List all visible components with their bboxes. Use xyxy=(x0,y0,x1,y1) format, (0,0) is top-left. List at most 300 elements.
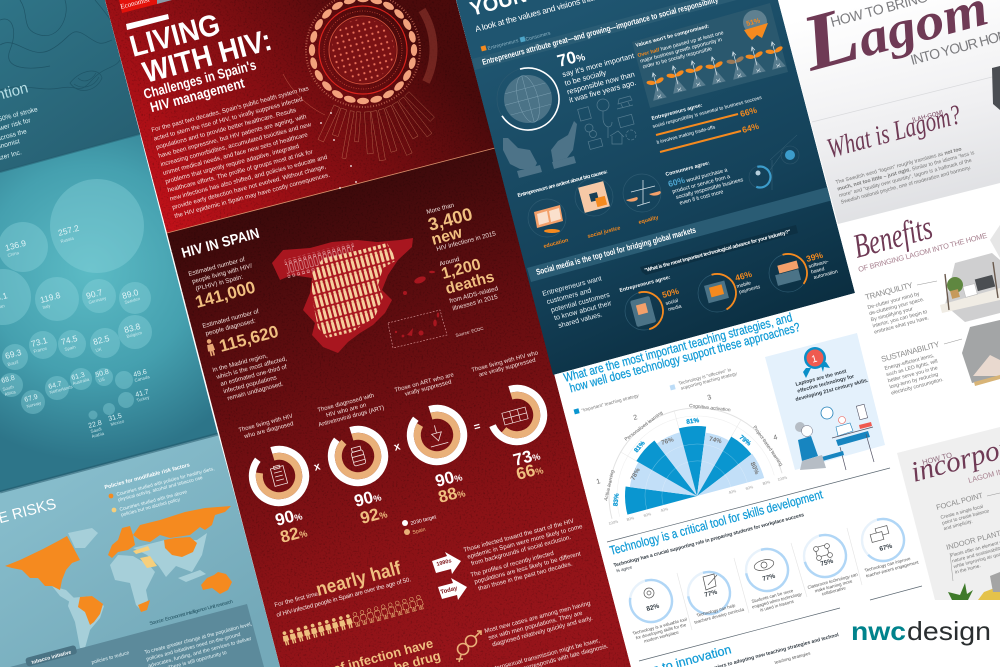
text: nearly half: of HIV-infected people in Spain are over the age of 50. xyxy=(276,576,412,619)
stat: mobile payments 46: payments xyxy=(738,284,761,295)
icon: equality xyxy=(623,174,661,226)
text block: Madrid region: remain undiagnosed. xyxy=(227,380,284,402)
item: sustainability: long-term by reducing xyxy=(889,372,939,390)
text block: intro: new infections has also shifted, and policies to educate and xyxy=(169,154,329,203)
illustration: virus xyxy=(283,0,434,189)
chart: bubble chart: 61.3 xyxy=(71,372,86,382)
heading: teaching strategies: What are the most important teaching strategies, and xyxy=(562,310,794,385)
chart: ring 1 diagnosed: 90% xyxy=(273,505,304,530)
icon: globe ring xyxy=(490,61,566,137)
chart labels: categories xyxy=(596,394,784,501)
callout: initiatives box: policies to reduce xyxy=(91,650,130,666)
illustration: brain outline xyxy=(0,0,123,90)
panel: how to incorporate lagom xyxy=(897,422,1000,600)
chart labels: percentages: 81% xyxy=(633,440,647,454)
item: indoor plant xyxy=(945,527,1000,581)
icon: social justice: social justice xyxy=(587,225,621,240)
stat: 70 percent: it was five years ago. xyxy=(568,78,637,105)
panel: Lagom benefits xyxy=(849,209,1000,397)
chart: bubble chart: 50.8 xyxy=(95,369,110,379)
item: sustainability: Energy-efficient items, xyxy=(884,353,935,372)
chart labels: ticks xyxy=(608,475,788,526)
chart: ring 4 combined: Those living with HIV who xyxy=(471,350,540,374)
legend: rings: Spain xyxy=(412,527,426,536)
stat: automation 39 xyxy=(765,250,839,296)
stat: people living with HIV xyxy=(188,256,255,308)
stat: automation 39: 39% xyxy=(805,250,824,264)
logo: nwc design: nwc xyxy=(851,616,906,646)
chart: ring 3 suppressed: 90% xyxy=(433,466,464,491)
text block: shared values: shared values. xyxy=(558,311,603,330)
stat: collaborative 75: 75% xyxy=(820,558,834,568)
chart: bubble chart: UK xyxy=(95,347,102,353)
stat: automation 39: automation xyxy=(813,269,839,281)
icon: plants xyxy=(644,39,788,101)
chart: bubble chart: 22.8 xyxy=(88,420,103,430)
callout: laptops xyxy=(765,333,885,470)
text block: intro: problems that urgently require adaptive, integrated xyxy=(165,143,300,186)
chart: fan chart xyxy=(589,388,782,519)
item: focal point: Create a single focal xyxy=(940,504,984,521)
stat: valuable tool 82: 82% xyxy=(646,603,660,613)
callout: laptops: developing 21st century skills. xyxy=(795,378,870,403)
stats: consumers agree xyxy=(665,160,746,208)
footer: logo area xyxy=(841,601,1000,667)
chart: bubble chart: 68.8 xyxy=(1,375,16,385)
chart: bubble chart: Arabia xyxy=(91,431,105,439)
chart: bubble chart: Turkey xyxy=(136,394,151,403)
panel: Lagom header xyxy=(778,0,1000,224)
stats: entrepreneurs agree: Entrepreneurs agree: xyxy=(651,102,703,122)
map legend: Policies for modifiable risk factors xyxy=(104,462,191,491)
item: sustainability: better serve you in the xyxy=(887,365,939,384)
legend: entrepreneurs consumers: Entrepreneurs xyxy=(487,38,520,52)
callout: initiatives box: tobacco initiative xyxy=(31,650,72,666)
chart labels: categories: Cognitive activation xyxy=(689,403,731,413)
chart labels: categories: 1 xyxy=(596,478,601,486)
chart: bubble chart xyxy=(0,179,152,439)
text block: intro: healthcare efforts. The profile of groups most at risk for xyxy=(167,149,314,194)
chart: bubble chart: 82.5 xyxy=(92,333,111,347)
title: Living with HIV: WITH HIV: xyxy=(139,24,275,90)
text block: new cases: diagnosed relatively quickly and early. xyxy=(491,615,594,648)
chart: bubble chart: Norway xyxy=(26,400,42,409)
legend: fan chart xyxy=(574,366,738,414)
chart: bubble chart: Brazil xyxy=(7,359,19,367)
chart labels: ticks: 40% xyxy=(660,507,669,513)
chart: bubble chart: Sweden xyxy=(124,296,141,305)
item: focal point xyxy=(935,491,1000,532)
chart: bubble chart: 41.7 xyxy=(135,389,150,399)
chart labels: percentages: 76% xyxy=(660,436,675,447)
item: tranquility: de-cluttering your space. xyxy=(869,297,925,317)
stat: people living with HIV: Estimated number of xyxy=(188,256,246,278)
stat: collaborative 75 xyxy=(799,530,861,600)
stat: engaged 77: is used in lessons xyxy=(760,599,795,613)
chart: ring 2 on ART: Antiretroviral drugs (ART) xyxy=(318,405,385,429)
image: lamp hexagon xyxy=(962,320,1000,386)
arrow: today xyxy=(438,578,467,600)
stat: valuable tool 82: modern workplace xyxy=(643,629,680,644)
image: plant and cushion xyxy=(948,572,1000,600)
chart: ring 4 combined: 73% xyxy=(511,445,542,470)
chart labels: ticks: 100% xyxy=(608,519,619,526)
chart: bubble chart: 90.7 xyxy=(85,287,104,301)
arrow: 1990s: 1990s xyxy=(436,558,452,568)
stat: people living with HIV: (PLHIV) in Spain: xyxy=(195,274,244,293)
chart: bubble chart: China xyxy=(7,250,20,258)
chart: ring 1 diagnosed xyxy=(238,414,312,547)
stats: consumers agree: Consumers agree: xyxy=(665,160,711,178)
stat: curricula 77: Technology can help xyxy=(696,603,736,618)
stat: social media 50: media xyxy=(668,304,683,313)
chart: bubble chart: Canada xyxy=(134,374,151,383)
text: nearly half: For the first time, xyxy=(274,590,321,609)
badge: 51 percent xyxy=(743,10,768,40)
chart: bubble chart: 119.8 xyxy=(39,290,62,305)
chart labels: percentages: 78% xyxy=(630,467,642,482)
stat: people diagnosed xyxy=(202,308,280,357)
section: big causes: Entrepreneurs are ardent about big causes: xyxy=(517,169,609,199)
stat: deaths: Around xyxy=(439,256,461,268)
stat: 70 percent xyxy=(555,45,642,105)
text: strategies: teaching strategies xyxy=(774,650,812,665)
chart: bubble chart: Australia xyxy=(72,377,90,386)
map legend: physical activity, alcohol and tobacco use xyxy=(117,475,204,503)
logo: nwc design: design xyxy=(907,616,991,646)
box: values not compromised: order to be socially responsible xyxy=(642,46,713,70)
chart: ring 3 suppressed xyxy=(394,372,470,507)
chart: ring 3 suppressed: Those on ART who are xyxy=(394,372,455,394)
chart: ring 3 suppressed: virally suppressed xyxy=(404,380,452,398)
text block: shared values: potential customers xyxy=(550,292,611,314)
callout: initiatives box xyxy=(10,604,264,667)
map legend: Countries studied with policies for healthy diets, xyxy=(116,466,215,498)
chart: bubble chart: 69.3 xyxy=(4,347,23,361)
text block: intro: acted to stem the rise of HIV, to virally suppress infected xyxy=(153,96,304,143)
legend: rings xyxy=(402,514,437,536)
heading: teaching strategies: how well does technology support these approaches? xyxy=(568,320,802,395)
chart labels: categories: 4 xyxy=(773,434,778,442)
stat: deaths: Source: ECDC xyxy=(455,326,484,338)
chart: world map xyxy=(5,506,232,648)
chart: bubble chart: Italy xyxy=(42,303,52,310)
text block: Madrid region: In the Madrid region, xyxy=(212,352,269,374)
icons: hands xyxy=(503,121,577,178)
text block: epidemic: Those infected toward the start of the HIV xyxy=(463,517,576,554)
text block: what is lagom: much, not too little – just right. Similar to the idioms "less is xyxy=(837,150,975,193)
item: tranquility xyxy=(864,280,937,336)
text block: shared values: customers and xyxy=(546,287,592,306)
callout: question: "What is the most important technological advance for your industry?" xyxy=(644,229,792,274)
symbol: equals: = xyxy=(473,420,482,434)
stat: valuable tool 82 xyxy=(625,575,690,646)
band: social media xyxy=(527,181,855,282)
chart: ring 2 on ART: 90% xyxy=(352,486,383,511)
box: values not compromised: Values won't be compromised: xyxy=(635,23,710,49)
chart labels: categories: 3 xyxy=(707,394,712,402)
stat: people diagnosed: 115,620 xyxy=(217,322,280,356)
title: Living with HIV xyxy=(130,15,271,82)
stats: entrepreneurs agree: social responsibility is essential to business success xyxy=(652,95,763,130)
text block: Madrid region: infected populations xyxy=(223,374,278,395)
item: tranquility: TRANQUILITY xyxy=(864,280,914,302)
chart: bubble chart: US xyxy=(98,377,105,383)
chart: ring 1 diagnosed: Those living with HIV xyxy=(238,414,294,434)
stat: new infections: new xyxy=(430,224,465,249)
stat: engaged 77: engaged when technology xyxy=(751,591,803,609)
chart: bubble chart: Mexico xyxy=(110,418,125,427)
chart: bubble chart: Netherlands xyxy=(49,384,74,395)
stats: entrepreneurs agree: 66% xyxy=(739,105,758,119)
source note: Source: Economist Intelligence Unit research xyxy=(149,599,234,627)
stat: 70 percent: to be socially xyxy=(564,68,607,88)
illustration: woman at desk xyxy=(795,404,874,470)
chart: bubble chart: Saudi xyxy=(90,426,102,434)
stat: collaborative 75: make learning more xyxy=(814,578,853,593)
chart: bubble chart: France xyxy=(33,345,48,354)
stat: curricula 77: teachers develop curricula xyxy=(694,607,745,625)
chart: bubble chart: 64.7 xyxy=(48,381,63,391)
callout: initiatives box: To create greater change at the population level, xyxy=(144,621,253,656)
callout: initiatives box: policies and initiatives need on-the-ground xyxy=(146,632,241,663)
chart: ring 4 combined xyxy=(471,350,550,484)
image: top hex xyxy=(990,225,1000,258)
stat: deaths xyxy=(439,256,501,338)
symbol: multiply: x xyxy=(393,440,403,454)
stat: automation 39: software- xyxy=(808,259,830,270)
chart: bubble chart: 257.2 xyxy=(57,223,80,238)
pronunciation: [LAH-GOM] xyxy=(912,110,944,124)
item: focal point: and simplicity. xyxy=(943,519,973,532)
stat: engaged 77: Students can be more xyxy=(751,588,794,604)
text block: new cases: Most new cases are among men having xyxy=(484,600,592,635)
chart: bubble chart: 136.9 xyxy=(4,238,27,253)
chart: ring 2 on ART: 92% xyxy=(358,503,389,528)
text: nearly half xyxy=(274,558,412,619)
stat: 70 percent: say it's more important xyxy=(561,51,635,79)
item: tranquility: By simplifying your xyxy=(870,306,914,323)
stats: consumers agree: 60% would purchase a xyxy=(667,167,728,189)
text block: shared values: Entrepreneurs want xyxy=(542,275,603,298)
chart: bubble chart: Africa xyxy=(4,389,17,397)
icon: education: education xyxy=(543,238,569,250)
stats: entrepreneurs agree: it involves making trade-offs xyxy=(656,124,717,146)
stats: consumers agree: socially responsible business xyxy=(675,177,744,201)
item: indoor plant: in the home. xyxy=(954,563,982,576)
title bar xyxy=(126,14,169,30)
chart: bubble chart: 89.0 xyxy=(121,287,140,301)
stat: engaged 77: 77% xyxy=(762,573,776,583)
chart: bubble chart: 83.8 xyxy=(123,321,142,335)
callout: laptops: effective technology for xyxy=(797,374,855,395)
text block: profiles: than those in the past two decades. xyxy=(477,560,574,592)
subtitle: Challenges in Spain's xyxy=(142,56,258,102)
badge: 51 percent: 51% xyxy=(746,17,762,28)
legend: entrepreneurs consumers: Consumers xyxy=(525,30,552,43)
stat: social media 50: 50% xyxy=(661,286,680,300)
icon: pill jar xyxy=(350,446,366,466)
legend: entrepreneurs consumers xyxy=(481,30,552,52)
text block: shared values: to know about their xyxy=(553,300,613,322)
stats: consumers agree: product or service from a xyxy=(672,174,731,195)
text block: what is lagom: The Swedish word "lagom" roughly translates as not too xyxy=(835,146,962,186)
text block: epidemic: from backgrounds of social exclusion. xyxy=(470,534,572,567)
legend: fan chart: supporting teaching strategy xyxy=(680,371,738,391)
chart: bubble chart: Germany xyxy=(88,295,107,305)
panel: education technology xyxy=(553,255,1000,667)
item: sustainability xyxy=(880,339,962,397)
section: big causes xyxy=(517,169,661,250)
legend: fan chart: Technology is "effective" in xyxy=(678,367,732,386)
stat: new infections xyxy=(426,202,497,253)
text block: what is lagom: more" and "quality over quantity", lagom is a hallmark of the xyxy=(838,158,972,199)
icon: table xyxy=(502,407,528,425)
stat: valuable tool 82: for developing skills for the xyxy=(635,622,687,640)
stat: mobile payments 46: mobile xyxy=(736,280,752,290)
chart labels: categories: Personalized learning xyxy=(624,410,664,443)
chart: bubble chart: 31.5 xyxy=(108,413,123,423)
arrow: 1990s xyxy=(432,552,461,574)
chart labels: ticks: 60% xyxy=(643,512,652,518)
chart: bubble chart: 73.1 xyxy=(30,335,49,349)
text block: profiles: populations are less likely to be different xyxy=(474,550,582,586)
text: entrepreneurs agree: Entrepreneurs agree: xyxy=(619,274,671,294)
chart labels: categories: Project-based learning xyxy=(751,425,784,468)
stats: consumers agree: even if it cost more xyxy=(679,189,724,207)
stat: parent engagement 67: Technology can improve xyxy=(864,556,912,573)
stats: entrepreneurs agree: 64% xyxy=(741,121,760,135)
stat: social media 50 xyxy=(621,286,683,334)
text block: intro: have been impressive, but HIV patients are ageing, with xyxy=(158,113,308,160)
chart: ring 2 on ART: HIV who are on xyxy=(326,403,367,419)
box: values not compromised xyxy=(632,3,788,108)
text block: intro: increasing comorbidities, accumulated toxicities and new xyxy=(160,121,312,168)
stat: parent engagement 67: 67% xyxy=(879,543,893,553)
icon: male symbols xyxy=(456,631,481,662)
panel: stroke report xyxy=(0,0,282,667)
stat: people diagnosed: people diagnosed: xyxy=(205,317,257,338)
chart: bubble chart: 74.5 xyxy=(60,333,79,347)
stat: deaths: from AIDS-related xyxy=(449,285,499,305)
text block: new cases: sex with men populations. They are xyxy=(488,610,584,642)
stat: parent engagement 67 xyxy=(857,514,920,578)
icon: equality: equality xyxy=(638,215,659,226)
text: nearly half: nearly half xyxy=(314,558,404,601)
heading: how to: HOW TO xyxy=(921,450,953,467)
stat: parent engagement 67: teacher-parent engagement xyxy=(865,559,920,578)
map legend: Countries studied with the above xyxy=(119,489,188,513)
chart: ring 3 suppressed: 88% xyxy=(436,482,467,507)
chart labels: categories: 2 xyxy=(633,414,638,422)
heading: HIV in Spain: HIV IN SPAIN xyxy=(180,226,261,262)
title: Living with HIV: LIVING xyxy=(126,8,224,64)
icon: dark product xyxy=(992,66,1000,110)
heading: benefits: Benefits xyxy=(849,209,936,266)
stat: mobile payments 46 xyxy=(694,269,761,316)
chart: ring 4 combined: 66% xyxy=(514,459,545,484)
item: sustainability: such as LED lights, will xyxy=(886,359,938,378)
stat: curricula 77: 77% xyxy=(704,589,718,599)
legend: rings: 2030 target xyxy=(410,514,437,527)
chart: bubble chart: 67.9 xyxy=(24,394,39,404)
stats: entrepreneurs agree xyxy=(651,95,763,152)
text block: intro: unmet medical needs, and face new sets of healthcare xyxy=(162,131,309,177)
chart: ring 4 combined: are virally suppressed xyxy=(478,358,536,379)
stat: curricula 77 xyxy=(683,567,745,625)
chart: ring 2 on ART xyxy=(317,393,388,524)
icon: social justice xyxy=(575,178,621,240)
legend: fan chart: "Important" teaching strategy xyxy=(581,393,640,413)
chart labels: percentages: 81% xyxy=(686,417,700,426)
symbol: multiply: x xyxy=(313,460,323,474)
chart: bubble chart: 49.6 xyxy=(133,369,148,379)
stat: people diagnosed: Estimated number of xyxy=(202,308,260,330)
text block: intro: populations and to provide better healthcare. Results xyxy=(155,107,297,151)
chart labels: percentages: 79% xyxy=(738,434,752,448)
stat: valuable tool 82: Technology is a valuable tool xyxy=(632,617,688,636)
chart: people row xyxy=(281,595,424,646)
text: supporting role: Technology has a crucial supporting role in preparing students for workplace success xyxy=(613,512,805,569)
chart labels: categories: Active learning xyxy=(603,469,616,501)
stat: new infections: More than xyxy=(426,202,455,216)
text block: epidemic: epidemic in Spain were more likely to come xyxy=(467,523,584,561)
item: sustainability: SUSTAINABILITY xyxy=(880,340,941,364)
stat: social media 50: social xyxy=(665,298,679,307)
icon: education xyxy=(528,199,569,250)
text block: Madrid region: which is the most affected, xyxy=(215,355,288,381)
subtitle: HIV management xyxy=(148,74,246,115)
heading: critical tool: Technology is a critical tool for skills development xyxy=(608,487,825,558)
item: tranquility: interior, you can begin to xyxy=(872,309,928,329)
arrow: today: Today xyxy=(440,586,459,596)
chart: ring 1 diagnosed: who are diagnosed xyxy=(243,421,294,440)
item: tranquility: embrace what you have. xyxy=(874,315,930,336)
box: values not compromised: Over half have passed up at least one xyxy=(637,30,724,59)
text: supporting role: % agree xyxy=(615,564,633,574)
chart labels: percentages: 83% xyxy=(612,493,621,507)
map legend xyxy=(104,462,217,518)
chart labels: percentages: 74% xyxy=(708,436,723,445)
stat: collaborative 75: Classroom technology can xyxy=(807,572,859,590)
item: sustainability: electricity consumption. xyxy=(891,377,944,397)
icons: consumer rings xyxy=(747,135,799,190)
panel: young innovators xyxy=(456,0,855,375)
text block: intro: provide early detection have not evolved. Without change, xyxy=(171,163,327,211)
chart labels: percentages xyxy=(612,417,760,507)
chart labels: ticks: 40% xyxy=(728,489,737,495)
item: focal point: point to create balance xyxy=(941,508,990,527)
chart: bubble chart: Belgium xyxy=(126,330,143,339)
text block: profiles: The profiles of recently infected xyxy=(470,550,555,579)
map legend: policies but no alcohol policy xyxy=(120,497,181,518)
icon: clipboard xyxy=(270,464,288,486)
item: tranquility: De-clutter your mind by xyxy=(867,291,921,311)
chart labels: ticks: 100% xyxy=(777,475,788,482)
image: shelf hexagon xyxy=(940,253,1000,322)
stat: 70 percent: 70% xyxy=(555,45,587,71)
stat: new infections: 3,400 xyxy=(426,204,475,235)
chart labels: ticks: 80% xyxy=(626,516,635,522)
icon: down arrow xyxy=(430,425,448,448)
text block: intro: For the past two decades, Spain's public health system has xyxy=(151,85,309,134)
stat: engaged 77 xyxy=(741,544,804,614)
icons: responsibility grid xyxy=(578,96,636,149)
chart: bubble chart: Spain xyxy=(64,344,77,352)
stat: collaborative 75: collaborative xyxy=(821,585,847,597)
icon: ribbon badge: 1 xyxy=(810,353,819,366)
item: focal point: FOCAL POINT xyxy=(935,491,984,512)
